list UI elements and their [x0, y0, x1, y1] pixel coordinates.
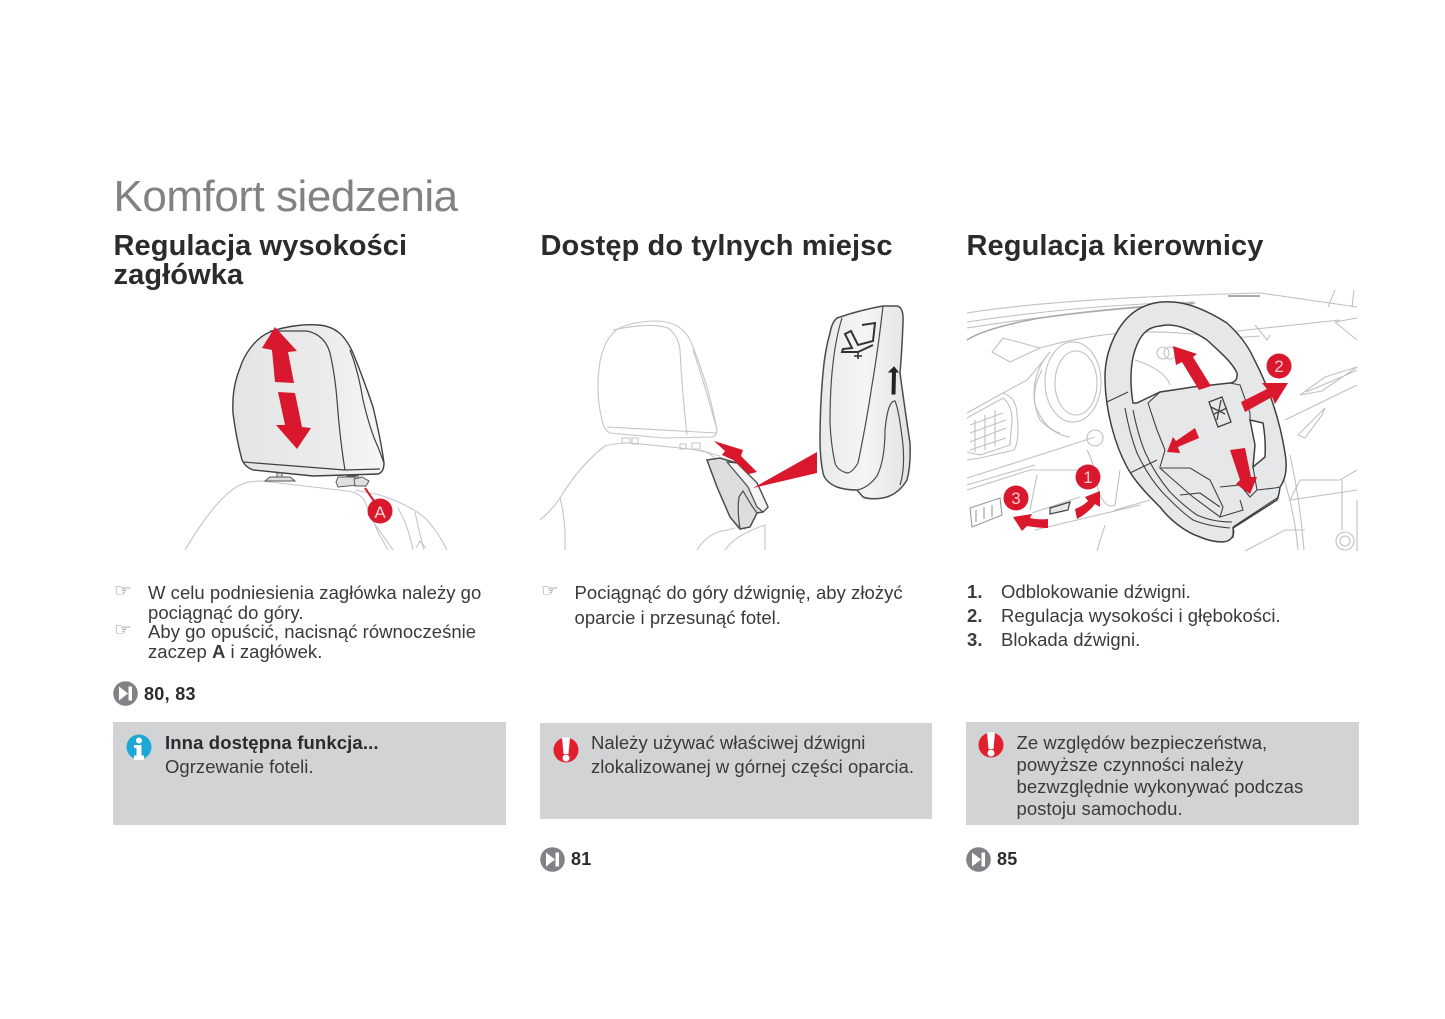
warning box: use correct lever: [540, 723, 932, 819]
icon: arrow unlock: [1075, 491, 1100, 519]
heading: headrest: [114, 230, 407, 291]
icon: steering wheel: [1105, 302, 1286, 542]
list text: Blokada dźwigni.: [1001, 629, 1140, 650]
icon: warning: [554, 738, 578, 762]
list numbers: 3.: [967, 629, 982, 650]
page reference: 81: 81: [571, 849, 592, 869]
numbered list: steering steps: [967, 581, 1281, 650]
callout: 2: [1266, 354, 1292, 378]
list text: Odblokowanie dźwigni.: [1001, 581, 1191, 602]
icon: warning: [978, 732, 1004, 758]
icon: arrow down: [1230, 448, 1257, 494]
icon: up arrow: [262, 327, 297, 383]
icon: arrow right: [1241, 383, 1288, 412]
callout: A: [365, 488, 392, 524]
icon: arrow inward: [1167, 428, 1199, 453]
text: safety warning: bezwzględnie wykonywać podczas: [1016, 776, 1303, 797]
icon: zoom wedge: [753, 452, 817, 488]
text: warning: [591, 732, 914, 777]
text: safety warning: Ze względów bezpieczeństwa,: [1016, 732, 1267, 753]
bullet hand icon: ☞: [541, 581, 559, 601]
heading: rear access: Dostęp do tylnych miejsc: [540, 230, 893, 262]
illustration: headrest with arrows: [184, 324, 448, 550]
text block: headrest instructions: [148, 582, 481, 662]
bullet hand icon 1: ☞: [114, 581, 132, 601]
list numbers: 1.: [967, 581, 982, 602]
text: other function: Inna dostępna funkcja...: [165, 732, 379, 753]
icon: emblem: [1209, 397, 1231, 427]
text: other function: [165, 732, 379, 777]
page reference: 85: 85: [997, 849, 1018, 869]
text: warning: Należy używać właściwej dźwigni: [591, 732, 865, 753]
panel: rear access: [540, 230, 932, 872]
title: Komfort siedzenia: [114, 172, 458, 221]
callout: 1: 1: [1083, 468, 1093, 487]
text block: headrest instructions: Aby go opuścić, nacisnąć równocześnie: [148, 621, 476, 642]
text block: headrest instructions: zaczep A i zagłówek.: [148, 640, 322, 662]
text: safety warning: [1016, 732, 1303, 819]
callout box: other available function: [113, 722, 506, 825]
icon: down arrow: [276, 392, 311, 449]
text: other function: Ogrzewanie foteli.: [165, 756, 314, 777]
text block: rear access instructions: Pociągnąć do góry dźwignię, aby złożyć: [574, 582, 903, 603]
page reference: 80, 83: [113, 681, 196, 706]
icon: dashboard lever: [1050, 502, 1070, 514]
page reference: 81: [540, 847, 592, 872]
heading: headrest: Regulacja wysokości: [114, 230, 407, 262]
bullet hand icon 2: ☞: [114, 620, 132, 640]
icon: arrow up-left: [1173, 346, 1211, 390]
text block: rear access instructions: [574, 582, 903, 628]
list numbers: 2.: [967, 605, 982, 626]
icon: handle close-up: [820, 306, 910, 499]
icon: up arrow on lever: [714, 441, 757, 474]
warning box: safety: [966, 722, 1359, 825]
list numbers: [967, 581, 982, 650]
panel: steering wheel adjustment: [966, 230, 1359, 872]
text: safety warning: postoju samochodu.: [1016, 798, 1183, 819]
list text: Regulacja wysokości i głębokości.: [1001, 605, 1281, 626]
heading: headrest: zagłówka: [114, 259, 243, 291]
text: warning: zlokalizowanej w górnej części oparcia.: [591, 756, 914, 777]
list text: [1001, 581, 1281, 650]
callout: 1: [1076, 464, 1100, 490]
text block: headrest instructions: pociągnąć do góry.: [148, 602, 304, 622]
text block: rear access instructions: oparcie i przesunąć fotel.: [574, 607, 781, 628]
heading: steering: Regulacja kierownicy: [966, 230, 1263, 262]
text: safety warning: powyższe czynności należy: [1016, 754, 1243, 775]
illustration: steering wheel: [966, 290, 1358, 552]
icon: arrow lock: [1013, 514, 1048, 531]
illustration: seat lever: [540, 305, 911, 550]
page reference: 80, 83: 80, 83: [144, 684, 196, 704]
text block: headrest instructions: W celu podniesienia zagłówka należy go: [148, 582, 481, 603]
callout: 3: 3: [1011, 489, 1021, 508]
callout: 3: [1004, 486, 1028, 510]
icon: info: [126, 734, 152, 760]
callout: A: A: [374, 503, 386, 522]
page reference: 85: [966, 847, 1018, 872]
icon: lever: [707, 458, 768, 529]
callout: 2: 2: [1274, 357, 1284, 376]
panel: headrest height adjustment: [113, 230, 506, 825]
